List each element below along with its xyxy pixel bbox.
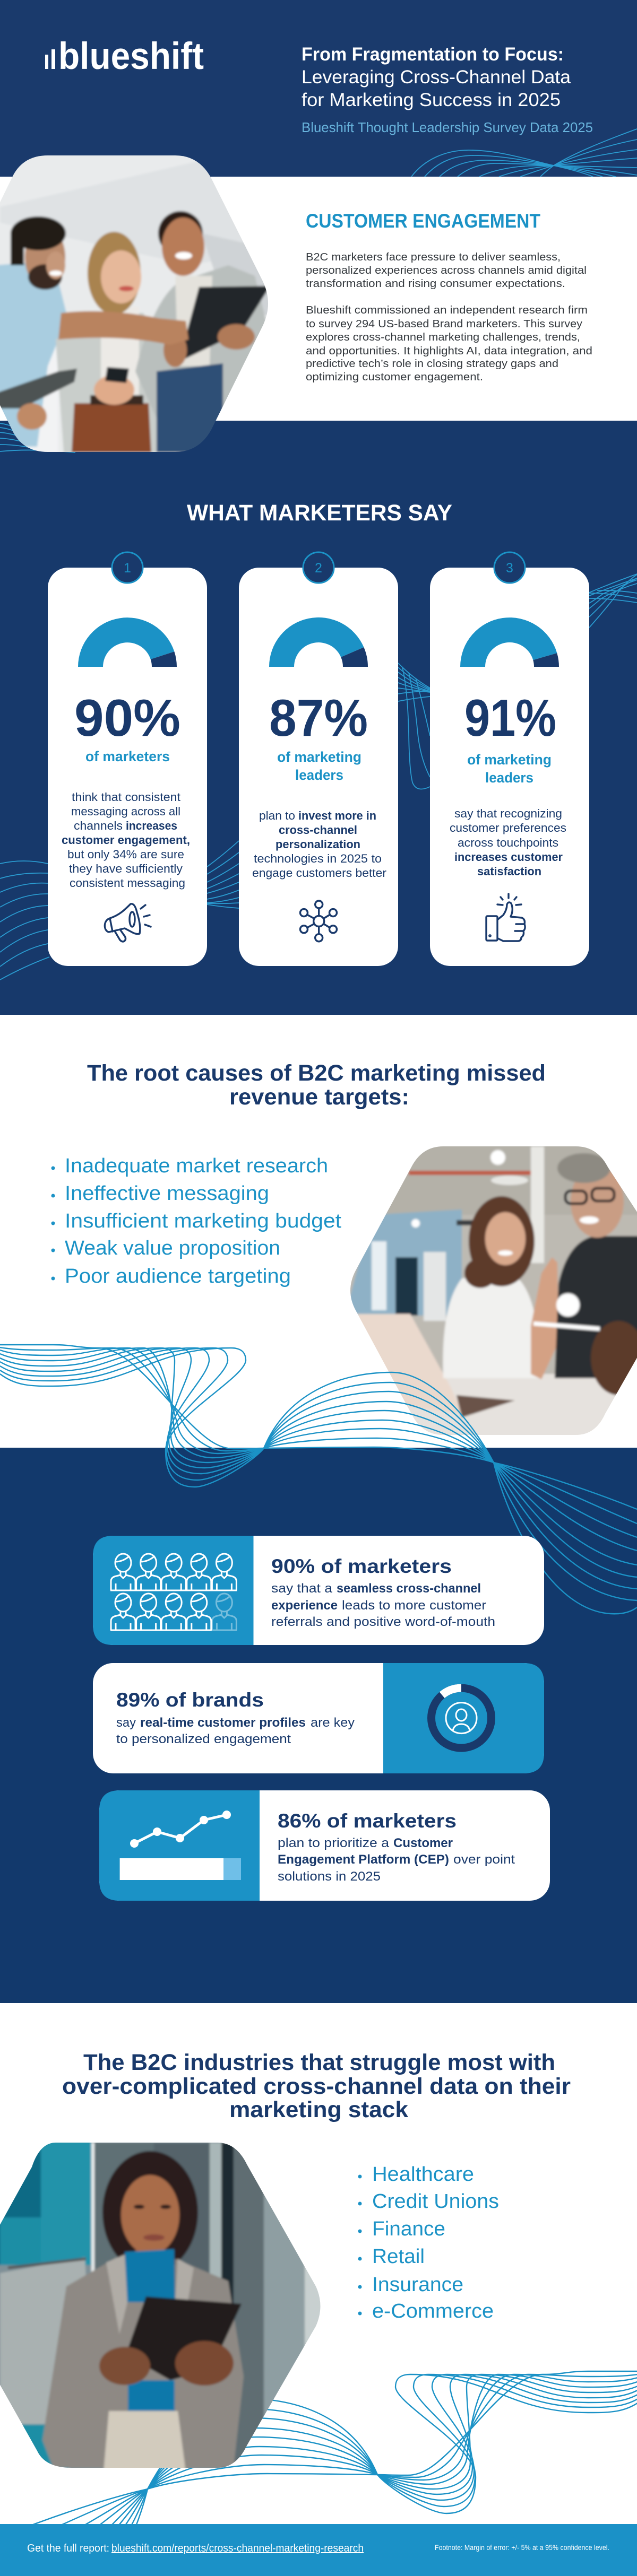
chart: gauge 91 percent — [460, 617, 559, 667]
list: root causes — [51, 1155, 341, 1287]
panel: customer engagement white band — [159, 177, 637, 421]
subtitle: Blueshift Thought Leadership Survey Data 2025 — [302, 119, 593, 135]
text block: research paragraph: optimizing customer engagement. — [306, 371, 483, 383]
label: of marketing leaders: of marketing — [467, 752, 552, 768]
panel: 89 percent of brands — [93, 1663, 544, 1773]
text block: CEP priority: Customer — [393, 1836, 453, 1850]
text block: card 1 description: consistent messaging — [70, 876, 185, 890]
text block: real-time profiles: say — [116, 1716, 136, 1730]
list: industries: Insurance — [372, 2274, 463, 2296]
text block: seamless experience: leads to more customer — [342, 1598, 486, 1613]
stat: 90 percent: 90% — [74, 689, 180, 747]
chart: rising line with bar — [120, 1811, 241, 1880]
title: for Marketing Success in 2025 — [302, 90, 561, 110]
stat heading: 90 percent of marketers: 90% of marketers — [271, 1555, 452, 1577]
icon: network hub — [300, 901, 337, 942]
text block: card 2 description: engage customers better — [252, 866, 387, 880]
list: industries: e-Commerce — [372, 2300, 494, 2322]
text block: card 2 description — [252, 809, 387, 880]
footnote: Footnote: Margin of error: +/- 5% at a 95% confidence level. — [435, 2544, 609, 2552]
list: industries: Healthcare — [372, 2163, 474, 2186]
text block: card 2 description: personalization — [276, 838, 360, 851]
text block: CEP priority: plan to prioritize a — [278, 1836, 390, 1850]
icon: thumbs up — [486, 894, 525, 941]
panel: 90 percent seamless experience — [93, 1536, 544, 1645]
text block: research paragraph: explores cross-channel marketing challenges, trends, — [306, 332, 580, 343]
panel: card 3 customer preferences — [430, 552, 589, 966]
footer link text: Get the full report: — [27, 2543, 109, 2554]
heading: customer engagement: CUSTOMER ENGAGEMENT — [306, 210, 540, 232]
list: root causes: Weak value proposition — [65, 1237, 280, 1259]
background: marketers navy band — [0, 421, 637, 1015]
label: of marketing leaders — [277, 749, 361, 783]
icon: megaphone — [105, 904, 151, 942]
text block: card 1 description: channels — [74, 819, 123, 832]
stat heading: 86 percent of marketers: 86% of marketers — [278, 1810, 457, 1832]
text block: real-time profiles: real-time customer profiles — [140, 1716, 306, 1730]
title — [302, 44, 571, 110]
heading: root causes: revenue targets: — [229, 1084, 409, 1110]
list: root causes: Ineffective messaging — [65, 1182, 269, 1205]
text block: seamless experience: say that a — [271, 1581, 333, 1596]
text block: pressure paragraph: transformation and rising consumer expectations. — [306, 278, 565, 290]
heading: root causes — [87, 1060, 546, 1110]
text block: seamless experience: experience — [271, 1598, 338, 1613]
heading: struggling industries — [62, 2050, 571, 2122]
text block: card 3 description: increases customer — [454, 850, 563, 864]
text block: card 1 description: customer engagement, — [62, 833, 190, 847]
logo: blueshift: blueshift — [58, 36, 204, 77]
text block: card 1 description — [62, 790, 190, 890]
background: header and intro navy band — [0, 0, 637, 177]
text block: card 3 description: satisfaction — [477, 865, 541, 878]
text block: real-time profiles: are key — [311, 1716, 355, 1730]
list: industries — [358, 2163, 499, 2322]
list: root causes: Inadequate market research — [65, 1155, 328, 1177]
badge: number 3 — [494, 552, 525, 583]
text block: CEP priority: over point — [453, 1852, 515, 1867]
footer — [0, 2524, 637, 2576]
text block: card 2 description: technologies in 2025 to — [254, 852, 382, 865]
label: of marketing leaders: leaders — [295, 767, 343, 783]
text block: card 1 description: increases — [126, 819, 177, 832]
text block: research paragraph — [306, 304, 592, 383]
text block: seamless experience — [271, 1581, 495, 1629]
text block: card 2 description: plan to — [259, 809, 295, 822]
badge: number 2: 2 — [315, 561, 322, 576]
stat: 91 percent: 91% — [464, 689, 556, 747]
icon: grid of people, nine of ten highlighted — [110, 1554, 237, 1630]
text block: pressure paragraph: B2C marketers face pressure to deliver seamless, — [306, 251, 561, 263]
photo: woman holding tablet — [0, 2138, 340, 2472]
chart: gauge 90 percent — [78, 617, 177, 667]
text block: real-time profiles: to personalized engagement — [116, 1732, 291, 1746]
title: Leveraging Cross-Channel Data — [302, 67, 571, 88]
text block: research paragraph: to survey 294 US-based Brand marketers. This survey — [306, 318, 582, 330]
list: industries: Credit Unions — [372, 2190, 499, 2213]
text block: card 1 description: they have sufficiently — [69, 862, 183, 875]
text block: card 1 description: think that consistent — [72, 790, 181, 804]
text block: card 3 description: across touchpoints — [458, 836, 558, 849]
chart: gauge 87 percent — [269, 617, 368, 667]
stat: 87 percent: 87% — [269, 689, 368, 747]
stat heading: 89 percent of brands: 89% of brands — [116, 1689, 264, 1711]
photo: two colleagues at laptop — [340, 1143, 637, 1440]
label: of marketing leaders — [467, 752, 552, 786]
text block: research paragraph: predictive tech’s role in closing strategy gaps and — [306, 358, 558, 370]
label: of marketing leaders: leaders — [485, 770, 533, 786]
badge: number 1: 1 — [124, 561, 131, 576]
label: of marketing leaders: of marketing — [277, 749, 361, 765]
badge: number 3: 3 — [506, 561, 513, 576]
panel: card 1 consistent messaging — [48, 552, 207, 966]
text block: seamless experience: referrals and positive word-of-mouth — [271, 1615, 495, 1629]
chart: donut with user icon — [431, 1688, 492, 1748]
background: stats navy band — [0, 1448, 637, 2003]
heading: root causes: The root causes of B2C marketing missed — [87, 1060, 546, 1086]
text block: CEP priority — [278, 1836, 515, 1884]
text block: card 3 description: customer preferences — [450, 821, 566, 834]
text block: pressure paragraph — [306, 251, 587, 290]
text block: seamless experience: seamless cross-channel — [337, 1581, 481, 1596]
heading: struggling industries: marketing stack — [229, 2097, 408, 2122]
text block: CEP priority: Engagement Platform (CEP) — [278, 1852, 449, 1867]
badge: number 1 — [112, 552, 143, 583]
text block: card 3 description — [450, 807, 566, 878]
text block: research paragraph: and opportunities. It highlights AI, data integration, and — [306, 345, 592, 357]
text block: card 1 description: messaging across all — [71, 805, 180, 818]
footer link text: blueshift.com/reports/cross-channel-marketing-research — [111, 2543, 364, 2554]
text block: card 1 description: but only 34% are sure — [67, 848, 184, 861]
text block: card 2 description: invest more in — [298, 809, 376, 822]
photo: three colleagues with tablet — [0, 155, 268, 452]
text block: card 2 description: cross-channel — [279, 823, 357, 837]
panel: customer engagement text — [306, 210, 592, 383]
list: root causes: Poor audience targeting — [65, 1265, 291, 1287]
heading: struggling industries: over-complicated cross-channel data on their — [62, 2074, 571, 2099]
label: of marketers: of marketers — [85, 749, 170, 764]
text block: card 3 description: say that recognizing — [454, 807, 562, 820]
text block: real-time profiles — [116, 1716, 355, 1746]
text block: pressure paragraph: personalized experiences across channels amid digital — [306, 265, 587, 276]
heading: struggling industries: The B2C industries that struggle most with — [83, 2050, 555, 2075]
title: From Fragmentation to Focus: — [302, 44, 564, 65]
text block: CEP priority: solutions in 2025 — [278, 1869, 381, 1884]
text block: research paragraph: Blueshift commissioned an independent research firm — [306, 304, 588, 316]
panel: card 2 personalization investment — [239, 552, 398, 966]
panel: 86 percent of marketers — [99, 1790, 550, 1901]
list: industries: Finance — [372, 2218, 445, 2240]
badge: number 2 — [303, 552, 334, 583]
list: industries: Retail — [372, 2246, 425, 2268]
list: root causes: Insufficient marketing budget — [65, 1210, 341, 1232]
heading: what marketers say: WHAT MARKETERS SAY — [187, 500, 452, 526]
